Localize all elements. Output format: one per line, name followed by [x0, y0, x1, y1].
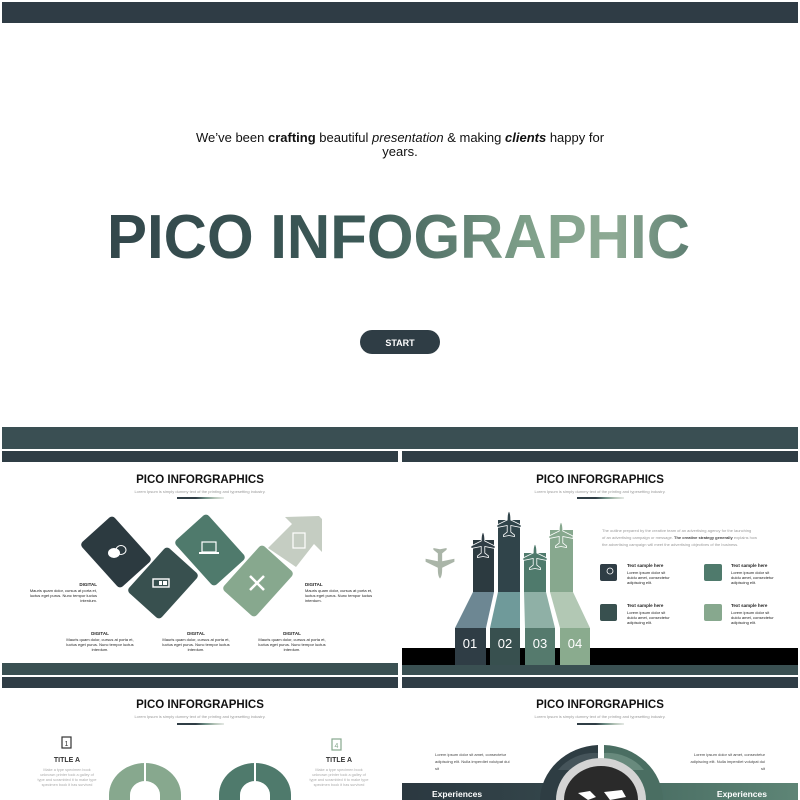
black base	[402, 648, 798, 665]
panel: experiences: PICO INFORGRAPHICS	[536, 699, 664, 711]
tagline: We’ve been crafting beautiful presentation & making clients happy for	[196, 130, 605, 145]
text blocks	[30, 582, 372, 652]
main title: PICO INFOGRAPHIC	[107, 203, 690, 272]
panel: arches: 1	[65, 741, 69, 748]
panel: experiences: adipiscing elit. Nulla imperdiet volutpat dui	[435, 759, 510, 764]
panel: experiences: Lorem Ipsum is simply dummy text of the printing and typesetting industry.	[534, 714, 666, 719]
columns: 02	[498, 636, 512, 651]
panel: experiences: adipiscing elit. Nulla imperdiet volutpat dui	[691, 759, 765, 764]
text blocks: luctus eget purus. Nunc tempor luctus	[258, 642, 326, 647]
panel: arches: unknown printer took a galley of	[40, 773, 95, 777]
panel: arches: unknown printer took a galley of	[312, 773, 367, 777]
icon items: duidu amet, consectetur	[731, 615, 774, 620]
text blocks: interdum.	[92, 647, 108, 652]
text blocks: DIGITAL	[79, 582, 97, 587]
start button: START	[385, 338, 415, 348]
text blocks: DIGITAL	[283, 631, 301, 636]
icon items: adipiscing elit.	[627, 580, 652, 585]
panel: experiences: Experiences	[717, 789, 767, 799]
text: years.	[382, 144, 418, 159]
panel: arches: specimen book it has survived	[314, 783, 364, 787]
icon items: Text sample here	[731, 563, 768, 568]
panel: arches: Make a type specimen book	[315, 768, 363, 772]
text blocks: DIGITAL	[187, 631, 205, 636]
paragraph: the advertising campaign will meet the advertising objectives of the business.	[602, 542, 738, 547]
text blocks: interdum.	[305, 598, 322, 603]
start button	[360, 330, 440, 354]
panel: experiences: Lorem ipsum dolor sit amet, consectetur	[435, 752, 507, 757]
text blocks: interdum.	[80, 598, 97, 603]
panel: steps diamond: Lorem Ipsum is simply dummy text of the printing and typesetting industry.	[134, 489, 266, 494]
top bar	[2, 2, 798, 23]
panel: arches: Make a type specimen book	[43, 768, 91, 772]
panel: experiences: sit	[761, 766, 766, 771]
columns: 03	[533, 636, 547, 651]
text blocks: Mauris quam dolor, cursus at porta et,	[258, 637, 326, 642]
icon items	[600, 563, 774, 625]
icon items: adipiscing elit.	[731, 620, 756, 625]
columns: 04	[568, 636, 582, 651]
panel: arches: 4	[335, 743, 339, 750]
panel: arches: TITLE A	[54, 757, 80, 764]
panel: experiences	[402, 677, 798, 800]
panel: planes chart	[402, 451, 798, 675]
text blocks: DIGITAL	[305, 582, 323, 587]
icon items: duidu amet, consectetur	[627, 615, 670, 620]
text blocks: interdum.	[284, 647, 300, 652]
icon items: duidu amet, consectetur	[731, 575, 774, 580]
text blocks: Mauris quam dolor, cursus at porta et,	[162, 637, 230, 642]
panel: arches	[2, 677, 398, 800]
icons	[108, 548, 120, 558]
icon items: adipiscing elit.	[731, 580, 756, 585]
icon items: Lorem ipsum dolor sit	[627, 610, 666, 615]
panel: experiences: Experiences	[432, 789, 482, 799]
columns: 01	[463, 636, 477, 651]
text blocks: Mauris quam dolor, cursus at porta et,	[30, 588, 97, 593]
text blocks: interdum.	[188, 647, 204, 652]
panel: steps diamond: PICO INFORGRAPHICS	[136, 474, 264, 486]
panel: arches: specimen book it has survived	[42, 783, 92, 787]
paragraph: of an advertising campaign or message. The creative strategy generally explains how	[602, 535, 757, 540]
icon items: duidu amet, consectetur	[627, 575, 670, 580]
panel: experiences: sit	[435, 766, 440, 771]
icon 1	[62, 737, 71, 748]
panel: experiences: Lorem ipsum dolor sit amet, consectetur	[694, 752, 766, 757]
panel: arches: PICO INFORGRAPHICS	[136, 699, 264, 711]
paragraph	[602, 528, 757, 547]
text blocks: Mauris quam dolor, cursus at porta et,	[66, 637, 134, 642]
text blocks: luctus eget purus. Nunc tempor luctus	[66, 642, 134, 647]
text blocks: luctus eget purus. Nunc tempor luctus	[162, 642, 230, 647]
panel: arches: type and scrambled it to make type	[310, 778, 368, 782]
panel: planes chart: PICO INFORGRAPHICS	[536, 474, 664, 486]
panel: arches: Lorem Ipsum is simply dummy text of the printing and typesetting industry.	[134, 714, 266, 719]
panel: planes chart: Lorem Ipsum is simply dummy text of the printing and typesetting industry.	[534, 489, 666, 494]
icon items: Lorem ipsum dolor sit	[731, 610, 770, 615]
text blocks: Mauris quam dolor, cursus at porta et,	[305, 588, 372, 593]
text blocks: luctus eget purus. Nunc tempor luctus	[30, 593, 97, 598]
columns	[426, 511, 590, 665]
paragraph: The outline prepared by the creative team of an advertising agency for the launching	[602, 528, 751, 533]
text blocks: DIGITAL	[91, 631, 109, 636]
text blocks: luctus eget purus. Nunc tempor luctus	[305, 593, 372, 598]
section band	[2, 427, 798, 449]
icon items: Text sample here	[627, 563, 664, 568]
icon items: Lorem ipsum dolor sit	[627, 570, 666, 575]
diamond shapes	[80, 513, 322, 620]
panel: arches: TITLE A	[326, 757, 352, 764]
icon items: Text sample here	[627, 603, 664, 608]
icon items: Lorem ipsum dolor sit	[731, 570, 770, 575]
icon items: adipiscing elit.	[627, 620, 652, 625]
panel: arches: type and scrambled it to make type	[38, 778, 96, 782]
panel: steps diamond	[2, 451, 398, 675]
icon items: Text sample here	[731, 603, 768, 608]
